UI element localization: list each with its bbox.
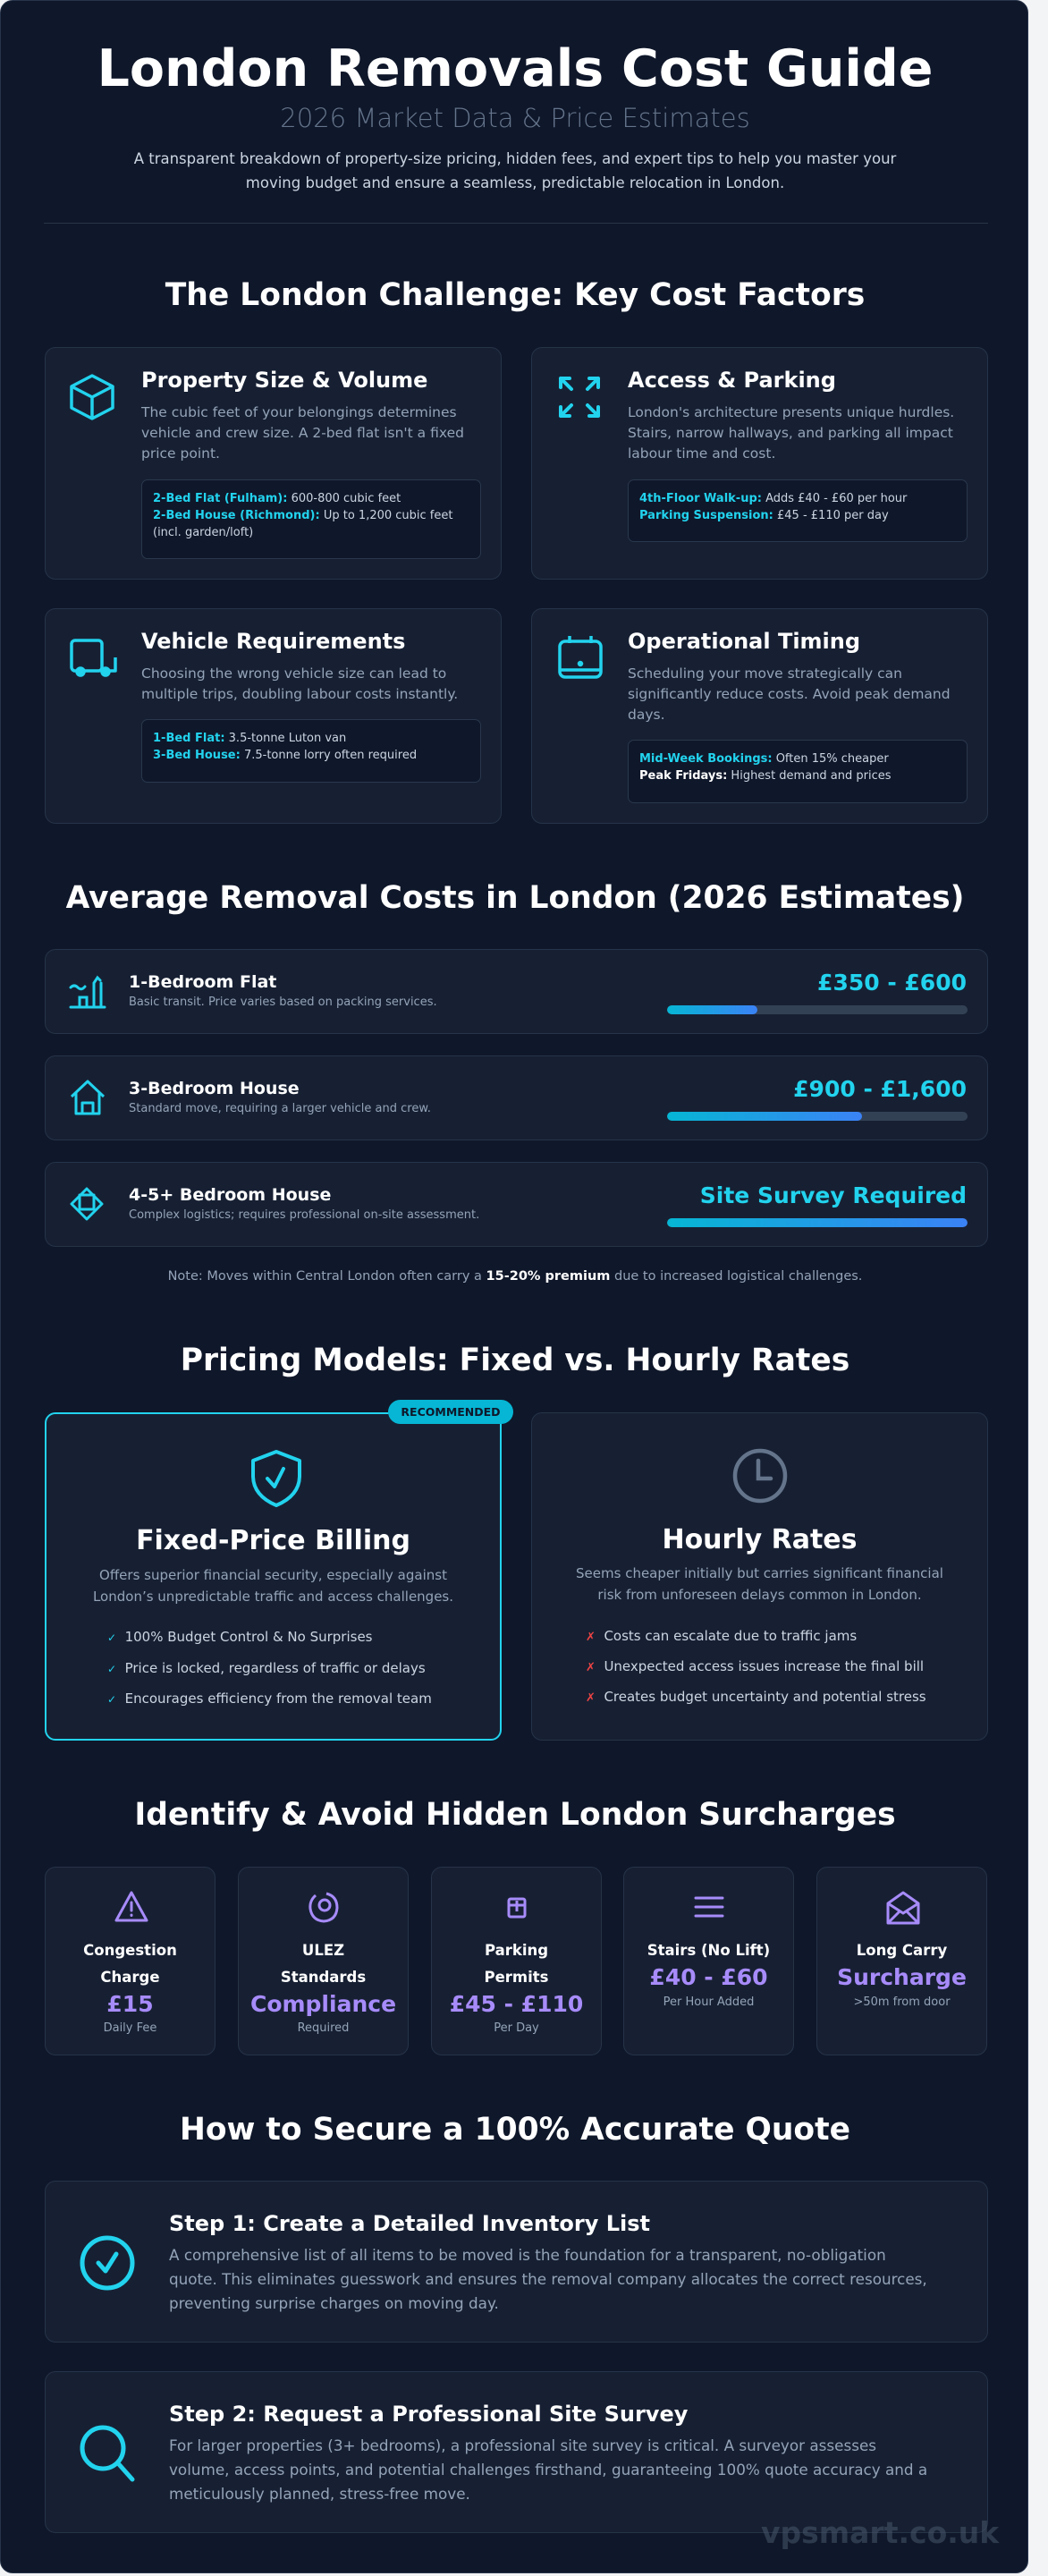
info box <box>628 740 968 803</box>
surcharge: congestion <box>45 1867 216 2055</box>
title: Hourly Rates <box>662 1524 858 1555</box>
step 2: volume, access points, and potential challenges firsthand, guaranteeing 100% quote accuracy and a <box>169 2461 927 2479</box>
step 2 <box>45 2371 988 2533</box>
intro paragraph: A transparent breakdown of property-size pricing, hidden fees, and expert tips to help you master your moving budget and ensure a seamless, predictable relocation in London. <box>134 150 896 191</box>
info box <box>141 719 481 783</box>
panel: operational timing <box>531 608 988 824</box>
icon: magnifier <box>80 2426 134 2481</box>
price: £350 - £600 <box>817 970 967 996</box>
step 2: Step 2: Request a Professional Site Survey <box>169 2402 688 2427</box>
surcharge: congestion: Daily Fee <box>104 2021 156 2035</box>
surcharge: long carry: Long Carry <box>857 1942 947 1959</box>
list: ✓ Price is locked, regardless of traffic or delays <box>107 1660 426 1676</box>
card title: Operational Timing <box>628 629 860 654</box>
icon: expand arrows <box>558 376 601 419</box>
heading: hidden surcharges: Identify & Avoid Hidden London Surcharges <box>134 1797 896 1833</box>
info box <box>141 479 481 559</box>
heading: key cost factors: The London Challenge: Key Cost Factors <box>165 277 865 313</box>
surcharge: parking <box>431 1867 602 2055</box>
surcharge: long carry: >50m from door <box>853 1996 951 2009</box>
card title: Vehicle Requirements <box>141 629 405 654</box>
icon: flat <box>69 975 106 1009</box>
info box: Mid-Week Bookings: Often 15% cheaper <box>639 752 889 766</box>
cost row: 3-bed house: 3-Bedroom House <box>129 1079 300 1098</box>
panel: property size <box>45 347 502 580</box>
surcharge: ULEZ: Required <box>298 2021 349 2035</box>
step 1: Step 1: Create a Detailed Inventory List <box>169 2211 650 2236</box>
price: £900 - £1,600 <box>793 1076 967 1102</box>
card text: Scheduling your move strategically can significantly reduce costs. Avoid peak demand days. <box>628 665 951 723</box>
icon: truck <box>70 639 117 677</box>
step 2: For larger properties (3+ bedrooms), a professional site survey is critical. A surveyor assesses <box>169 2436 876 2454</box>
note: Note: Moves within Central London often carry a 15-20% premium due to increased logistical challenges. <box>168 1269 862 1284</box>
list <box>586 1628 926 1705</box>
cost row: 3-bed house: Standard move, requiring a larger vehicle and crew. <box>129 1102 431 1115</box>
card text: London's architecture presents unique hurdles. Stairs, narrow hallways, and parking all impact labour time and cost. <box>628 404 954 462</box>
watermark: vpsmart.co.uk <box>761 2515 999 2550</box>
surcharge: parking: Permits <box>485 1969 548 1986</box>
card title: Property Size & Volume <box>141 368 427 393</box>
cost row: 1-bed flat <box>45 949 988 1034</box>
panel: vehicle requirements <box>45 608 502 824</box>
price: Site Survey Required <box>700 1182 967 1208</box>
list: ✓ Encourages efficiency from the removal team <box>107 1690 432 1707</box>
info box: 1-Bed Flat: 3.5-tonne Luton van <box>153 732 346 745</box>
surcharge: congestion: £15 <box>106 1991 154 2017</box>
description: Offers superior financial security, especially against London’s unpredictable traffic and access challenges. <box>93 1567 453 1605</box>
bar <box>667 1112 968 1121</box>
surcharge: ULEZ: ULEZ <box>302 1942 344 1959</box>
list: ✗ Costs can escalate due to traffic jams <box>586 1628 857 1644</box>
icon: cube <box>70 374 114 420</box>
surcharge: congestion: Congestion <box>83 1942 177 1959</box>
panel: fixed price <box>45 1412 502 1741</box>
cost row: 3-bed house <box>45 1055 988 1140</box>
surcharge: long carry <box>816 1867 987 2055</box>
surcharge: stairs <box>623 1867 794 2055</box>
step 1: preventing surprise charges on moving day. <box>169 2294 499 2312</box>
info box: 3-Bed House: 7.5-tonne lorry often required <box>153 749 417 762</box>
badge: recommended <box>388 1400 513 1424</box>
heading: average costs: Average Removal Costs in London (2026 Estimates) <box>66 880 964 916</box>
cost row: 1-bed flat: Basic transit. Price varies based on packing services. <box>129 996 437 1009</box>
surcharge: ULEZ: Standards <box>281 1969 366 1986</box>
surcharge: ULEZ <box>238 1867 409 2055</box>
cost row: 4-5 bed <box>45 1162 988 1247</box>
step 2: meticulously planned, stress-free move. <box>169 2485 470 2503</box>
surcharge: stairs: £40 - £60 <box>649 1964 768 1990</box>
icon: check circle <box>80 2236 134 2290</box>
icon: house <box>71 1080 105 1114</box>
badge: recommended: RECOMMENDED <box>401 1405 501 1419</box>
list: ✗ Creates budget uncertainty and potential stress <box>586 1689 926 1705</box>
card title: Access & Parking <box>628 368 836 393</box>
icon: calendar <box>558 636 603 679</box>
title: Fixed-Price Billing <box>136 1525 410 1556</box>
cost row: 1-bed flat: 1-Bedroom Flat <box>129 972 276 992</box>
heading: accurate quote: How to Secure a 100% Accurate Quote <box>180 2112 850 2148</box>
subtitle: 2026 Market Data & Price Estimates <box>280 103 750 133</box>
cost row: 4-5 bed: 4-5+ Bedroom House <box>129 1185 331 1205</box>
surcharge: stairs: Stairs (No Lift) <box>647 1942 770 1959</box>
icon: shield <box>251 1450 301 1507</box>
info box: 2-Bed House (Richmond): Up to 1,200 cubic feet (incl. garden/loft) <box>153 509 452 539</box>
surcharge: congestion: Charge <box>100 1969 160 1986</box>
bar <box>667 1005 968 1014</box>
surcharge: ULEZ: Compliance <box>250 1991 396 2017</box>
card text: Choosing the wrong vehicle size can lead to multiple trips, doubling labour costs instantly. <box>141 665 458 702</box>
panel: access and parking <box>531 347 988 580</box>
icon: diamond box <box>70 1187 104 1221</box>
description: Seems cheaper initially but carries significant financial risk from unforeseen delays common in London. <box>576 1565 943 1603</box>
cost row: 4-5 bed: Complex logistics; requires professional on-site assessment. <box>129 1208 479 1222</box>
surcharge: stairs: Per Hour Added <box>663 1996 754 2009</box>
info box: 2-Bed Flat (Fulham): 600-800 cubic feet <box>153 492 401 505</box>
surcharge: parking: Per Day <box>494 2021 539 2035</box>
step 1: quote. This eliminates guesswork and ensures the removal company allocates the correct resources, <box>169 2270 927 2288</box>
info box: 4th-Floor Walk-up: Adds £40 - £60 per hour <box>639 492 907 505</box>
info box: Peak Fridays: Highest demand and prices <box>639 769 892 783</box>
info box <box>628 479 968 542</box>
card text: The cubic feet of your belongings determines vehicle and crew size. A 2-bed flat isn't a fixed price point. <box>141 404 464 462</box>
info box: Parking Suspension: £45 - £110 per day <box>639 509 889 522</box>
panel: hourly rates <box>531 1412 988 1741</box>
surcharge: parking: £45 - £110 <box>450 1991 583 2017</box>
heading: pricing models: Pricing Models: Fixed vs. Hourly Rates <box>181 1343 849 1378</box>
step 1: A comprehensive list of all items to be moved is the foundation for a transparent, no-obligation <box>169 2246 886 2264</box>
list <box>107 1629 432 1707</box>
list: ✓ 100% Budget Control & No Surprises <box>107 1629 372 1645</box>
surcharge: parking: Parking <box>485 1942 548 1959</box>
title: London Removals Cost Guide <box>97 39 933 98</box>
bar <box>667 1218 968 1227</box>
icon: clock <box>733 1449 787 1503</box>
step 1 <box>45 2181 988 2343</box>
surcharge: long carry: Surcharge <box>837 1964 967 1990</box>
list: ✗ Unexpected access issues increase the final bill <box>586 1658 924 1674</box>
